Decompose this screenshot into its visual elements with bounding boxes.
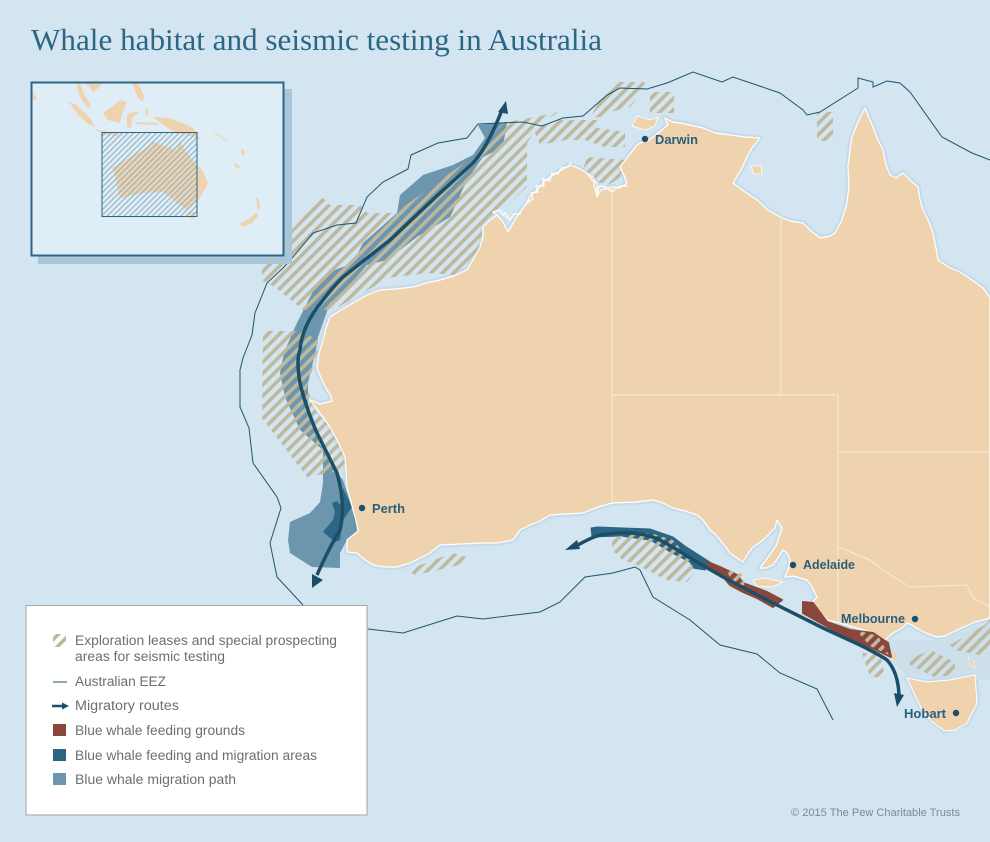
copyright: © 2015 The Pew Charitable Trusts bbox=[791, 807, 960, 819]
migratory route: south coast bbox=[565, 533, 904, 707]
King Island bbox=[892, 652, 897, 661]
legend: exploration leases: areas for seismic testing bbox=[75, 649, 225, 664]
inset background bbox=[31, 82, 284, 256]
inset study area bbox=[102, 132, 197, 216]
Kangaroo Island bbox=[753, 578, 783, 587]
city: Melbourne: Melbourne bbox=[841, 611, 905, 626]
legend bbox=[26, 606, 367, 815]
legend box bbox=[26, 606, 367, 815]
legend: exploration leases: Exploration leases and special prospecting bbox=[75, 633, 337, 648]
arrowhead north bbox=[498, 101, 508, 114]
continental shelf shading bbox=[310, 108, 990, 731]
exploration leases and special prospecting areas bbox=[262, 82, 990, 677]
city: Perth: Perth bbox=[372, 501, 405, 516]
blue whale feeding grounds bbox=[708, 562, 891, 657]
inset landmasses bbox=[32, 83, 260, 227]
Australian mainland bbox=[310, 108, 990, 640]
legend: Australian EEZ: Australian EEZ bbox=[75, 674, 166, 689]
migratory route: west coast bbox=[298, 101, 508, 588]
legend: migratory routes: Migratory routes bbox=[75, 698, 179, 713]
Groote Eylandt bbox=[751, 166, 762, 174]
Flinders Island bbox=[968, 657, 975, 668]
state borders bbox=[612, 187, 990, 622]
inset shadow bbox=[38, 89, 292, 264]
inset frame bbox=[32, 82, 284, 256]
arrowhead south-east bbox=[894, 693, 904, 707]
exploration leases over feeding grounds bbox=[727, 570, 889, 655]
blue whale feeding and migration area: Great Australian Bight bbox=[591, 527, 710, 570]
legend: feeding grounds: Blue whale feeding grounds bbox=[75, 723, 245, 738]
map: Australia with whale habitat and seismic testing bbox=[240, 72, 990, 731]
blue whale migration path bbox=[280, 122, 507, 568]
Australian EEZ boundary bbox=[240, 72, 990, 720]
title: Whale habitat and seismic testing in Australia bbox=[31, 22, 602, 57]
inset locator map bbox=[31, 82, 292, 264]
city: Hobart: Hobart bbox=[904, 706, 947, 721]
arrowhead west bbox=[565, 540, 580, 550]
blue whale feeding and migration area: Perth bbox=[323, 488, 352, 542]
Melville Island bbox=[632, 116, 658, 130]
city: Adelaide: Adelaide bbox=[803, 557, 855, 572]
Tasmania bbox=[907, 675, 977, 731]
legend: migration path: Blue whale migration path bbox=[75, 772, 236, 787]
arrowhead south bbox=[312, 574, 323, 588]
city: Darwin: Darwin bbox=[655, 132, 698, 147]
Bass Strait shelf bbox=[885, 622, 990, 680]
legend: feeding and migration areas: Blue whale feeding and migration areas bbox=[75, 748, 317, 763]
legend: exploration leases bbox=[53, 633, 337, 664]
